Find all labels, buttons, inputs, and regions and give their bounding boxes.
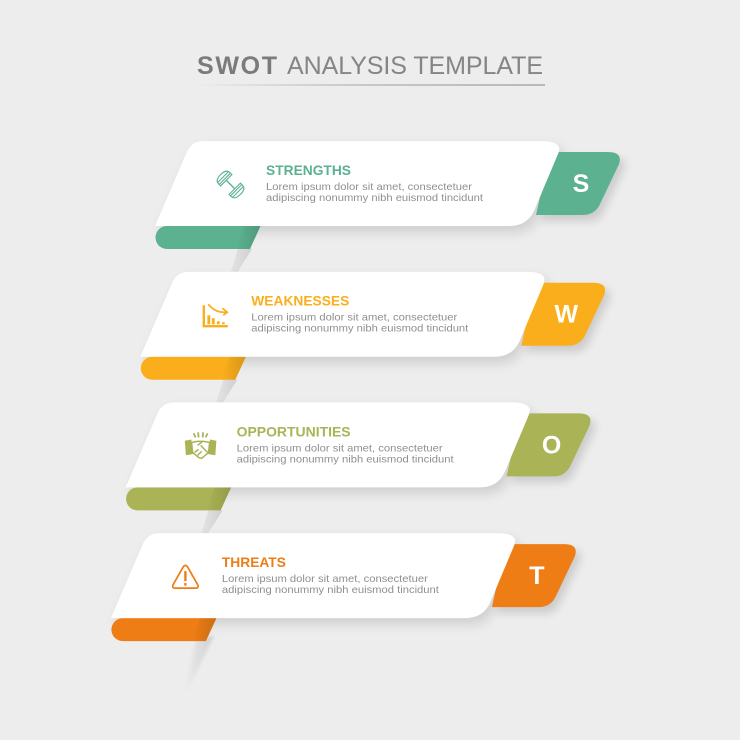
description: weaknesses (251, 312, 468, 335)
description: strengths: adipiscing nonummy nibh euismod tincidunt (266, 192, 483, 204)
tab: S: S (573, 170, 589, 198)
card: strengths (155, 141, 559, 226)
panel: weaknesses (140, 272, 610, 430)
description: threats: adipiscing nonummy nibh euismod tincidunt (222, 584, 439, 596)
icon: declining bar chart (204, 304, 228, 326)
description: weaknesses: adipiscing nonummy nibh euismod tincidunt (251, 323, 468, 335)
description: opportunities (237, 442, 454, 465)
heading: opportunities: OPPORTUNITIES (237, 423, 351, 439)
card: opportunities (126, 402, 530, 487)
icon: handshake (186, 432, 216, 458)
accent strip: threats (111, 618, 216, 641)
heading: weaknesses: WEAKNESSES (251, 293, 349, 309)
tab: W (521, 283, 605, 346)
tab: W: W (554, 301, 578, 329)
tab: O: O (542, 431, 561, 459)
description: strengths (266, 181, 483, 204)
heading: threats: THREATS (222, 554, 286, 570)
accent strip: weaknesses (141, 357, 246, 380)
card: threats (111, 533, 515, 618)
accent strip: opportunities (126, 487, 231, 510)
tab: S (536, 152, 620, 215)
panel: strengths (155, 141, 625, 299)
heading: strengths: STRENGTHS (266, 162, 351, 178)
tab: T: T (529, 562, 545, 590)
accent strip: strengths (156, 226, 260, 249)
description: opportunities: Lorem ipsum dolor sit amet, consectetuer (237, 442, 443, 454)
tab: O (507, 413, 590, 476)
description: strengths: Lorem ipsum dolor sit amet, consectetuer (266, 181, 473, 193)
icon: warning triangle (173, 565, 198, 588)
description: threats: Lorem ipsum dolor sit amet, consectetuer (222, 573, 428, 585)
tab: T (492, 544, 576, 607)
description: weaknesses: Lorem ipsum dolor sit amet, consectetuer (251, 312, 458, 324)
description: opportunities: adipiscing nonummy nibh euismod tincidunt (237, 453, 454, 465)
card: weaknesses (140, 272, 545, 357)
description: threats (222, 573, 439, 596)
panel: opportunities (126, 402, 595, 560)
title: ANALYSIS TEMPLATE (287, 52, 543, 80)
panel: threats (111, 533, 581, 692)
icon: dumbbell (215, 169, 246, 200)
title: SWOT (197, 52, 277, 80)
title underline (197, 84, 545, 86)
